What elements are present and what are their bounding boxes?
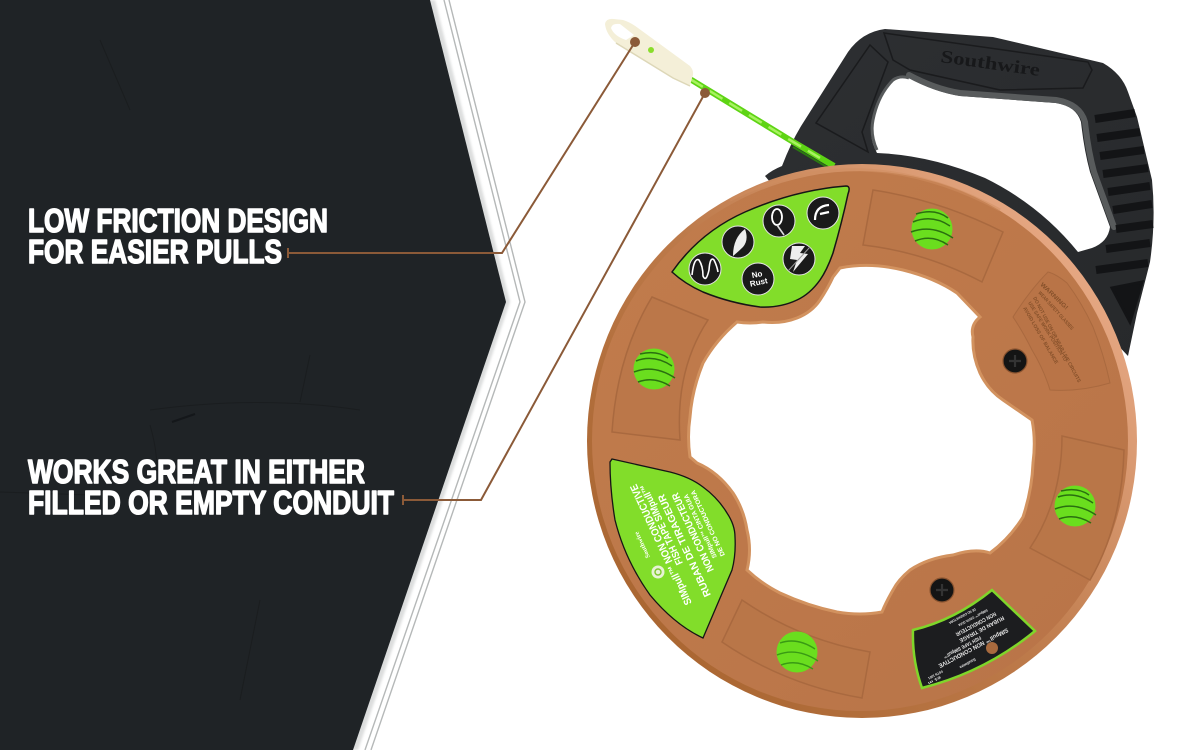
- inset panel: warning text: AVOID LOSS OF BALANCE: [1021, 306, 1059, 366]
- label: green icon badge: [672, 186, 849, 307]
- coil window: top: [911, 208, 953, 250]
- product badge text: DE NO CONDUCTORA: [690, 489, 727, 557]
- southwire mark: [633, 530, 664, 578]
- reel body: copper housing: [587, 164, 1137, 718]
- fish tape: twisted green wire: [690, 79, 834, 170]
- coil window: left: [634, 348, 675, 390]
- handle brand text: Southwire: [939, 46, 1041, 80]
- label: black warning sticker: [913, 590, 1035, 688]
- coil window: right: [1054, 486, 1096, 526]
- hole: reel centre opening: [688, 265, 1034, 614]
- label: black warning sticker: FISH TAPE SIMpull™: [942, 634, 982, 659]
- inset panel: top right: [863, 190, 1003, 282]
- product badge text: [628, 482, 727, 607]
- product badge text: FISH TAPE SIMpull™: [639, 482, 686, 566]
- callout text: filled or empty conduit: WORKS GREAT IN EITHER: [28, 453, 365, 490]
- label: black warning sticker: RUBAN DE TIRAGE: [958, 614, 1005, 643]
- icon: no rust: Rust: [749, 276, 769, 289]
- inset panel: warning text: USE SAFE WORK POSITION TO: [1026, 301, 1068, 363]
- product badge text: SIMpull™ CINTA GUIA: [683, 492, 719, 559]
- icon: feather: [722, 226, 754, 258]
- icon: pull loop: [763, 205, 795, 237]
- label: black warning sticker: NON CONDUCTEUR: [954, 610, 997, 637]
- screw: bottom: [930, 578, 954, 602]
- label: black warning sticker: FSTN 1001: [927, 669, 943, 680]
- callout text: filled or empty conduit: FILLED OR EMPTY CONDUIT: [28, 484, 394, 521]
- callout text: low friction design: LOW FRICTION DESIGN: [28, 202, 328, 239]
- label: black warning sticker: SIMpull™ NON CONDUCTIVE: [937, 626, 1009, 669]
- inset panel: warning text: [1013, 272, 1110, 390]
- product badge text: NON CONDUCTEUR: [670, 490, 717, 573]
- product badge text: RUBAN DE TIRAGEUR: [656, 491, 714, 598]
- callout text: filled or empty conduit: [28, 453, 394, 521]
- icon: no rust: [742, 263, 774, 295]
- inset panel: right: [1030, 436, 1124, 580]
- label: black warning sticker: SIMpull™ CINTA GUIA: [957, 608, 988, 627]
- product badge text: SIMpull™ NON CONDUCTIVE: [628, 482, 695, 607]
- inset panel: warning text: WARNING!: [1039, 282, 1069, 311]
- handle ribs: [1095, 113, 1153, 322]
- handle: black grip: [765, 29, 1154, 356]
- callout text: low friction design: FOR EASIER PULLS: [28, 233, 282, 270]
- icon: wave: [689, 253, 721, 285]
- screw: right: [1003, 349, 1027, 373]
- southwire mark: Southwire: [633, 530, 652, 559]
- label: green product badge: [610, 459, 735, 638]
- label: black warning sticker: DE NO CONDUCTORA: [948, 607, 976, 625]
- label: black warning sticker: Southwire: [958, 657, 977, 670]
- icon: no rust: No: [751, 269, 763, 280]
- coil window: bottom: [776, 632, 818, 672]
- leader line: wire callout: [403, 89, 709, 505]
- label: black warning sticker: 61 m: [927, 675, 941, 685]
- icon: lightning slash: [783, 243, 815, 275]
- icon: tape gauge: [807, 197, 839, 229]
- inset panel: warning text: WEAR SAFETY GLASSES: [1037, 290, 1075, 332]
- panel: dark chevron background: [0, 0, 510, 750]
- inset panel: left: [612, 297, 708, 440]
- fish tape nib: ivory pulling tip: [605, 19, 693, 86]
- inset panel: warning text: DO NOT USE ON OR NEAR LIVE CIRCUITS: [1031, 296, 1082, 384]
- divider: double chevron lines: [365, 0, 525, 750]
- callout text: low friction design: [28, 202, 328, 270]
- leader line: nib callout: [288, 38, 639, 258]
- inset panel: bottom: [722, 600, 870, 698]
